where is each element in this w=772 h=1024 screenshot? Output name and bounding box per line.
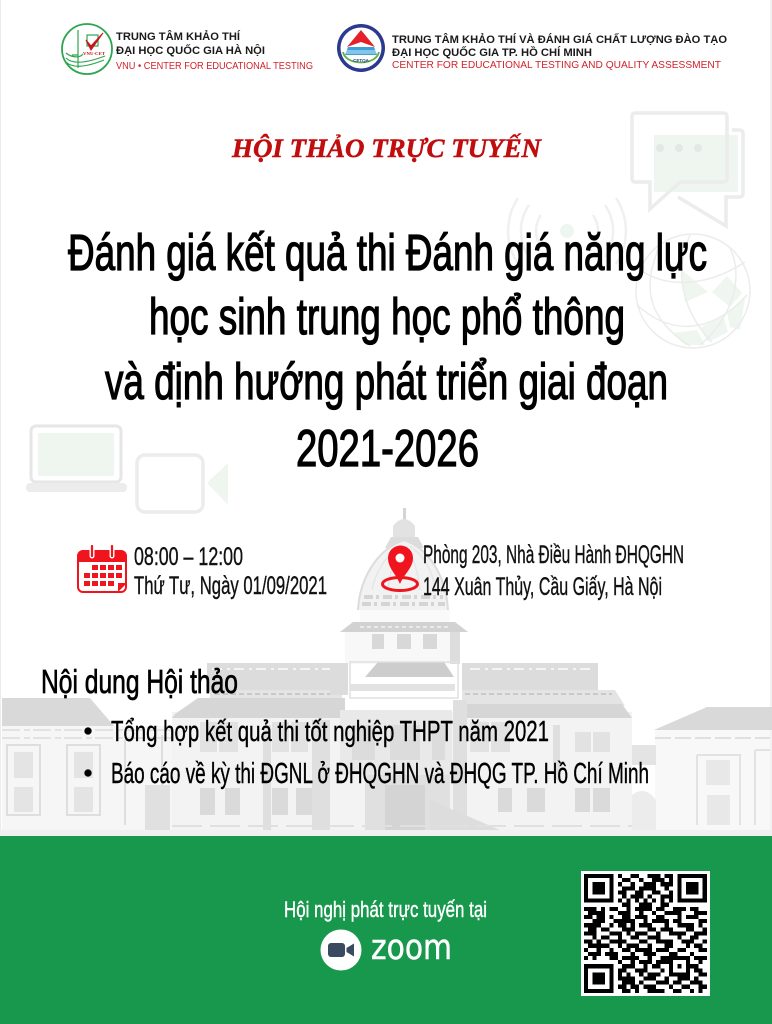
header logo: VNU-CET: VNU-CET: [83, 51, 105, 56]
background icon: globe: [636, 234, 750, 348]
background icon: chat bubbles: [632, 113, 743, 226]
bullet list: [84, 716, 649, 790]
header logo: CETQA: CETQA: [353, 58, 370, 63]
footer panel: [0, 836, 772, 1024]
main title: 2021-2026: [296, 420, 479, 478]
header logo: CETQA: [337, 24, 385, 72]
event location: [423, 541, 684, 601]
QR code: [581, 871, 710, 996]
building: central dome and tower: [330, 508, 468, 698]
header text: CETQA center: [392, 33, 727, 71]
zoom wordmark: zoom: [371, 928, 452, 968]
header text: VNU center: ĐẠI HỌC QUỐC GIA HÀ NỘI: [116, 43, 265, 57]
heading: workshop content: Nội dung Hội thảo: [41, 663, 238, 700]
icon: location pin: [382, 546, 418, 590]
bullet list: Tổng hợp kết quả thi tốt nghiệp THPT năm 2021: [111, 716, 549, 748]
background icon: signal waves: [508, 198, 626, 264]
header text: CETQA center: TRUNG TÂM KHẢO THÍ VÀ ĐÁNH GIÁ CHẤT LƯỢNG ĐÀO TẠO: [392, 33, 727, 46]
header text: VNU center: VNU • CENTER FOR EDUCATIONAL TESTING: [116, 60, 313, 72]
footer text: streamed online: Hội nghị phát trực tuyến tại: [284, 897, 487, 922]
building: left wing: [2, 698, 174, 830]
event time: [134, 543, 327, 600]
building: main hall: [172, 663, 632, 830]
icon: zoom logo: [320, 930, 362, 970]
building: right wing: [632, 707, 772, 830]
header logo: VNU-CET: [62, 24, 112, 74]
background icon: video camera: [137, 455, 228, 512]
background icon: laptop: [26, 426, 127, 492]
background illustration: university building: [0, 508, 772, 836]
main title: [68, 224, 707, 478]
header text: VNU center: TRUNG TÂM KHẢO THÍ: [116, 30, 241, 43]
subtitle: online workshop: HỘI THẢO TRỰC TUYẾN: [231, 134, 542, 163]
event time: Thứ Tư, Ngày 01/09/2021: [134, 572, 327, 600]
header text: CETQA center: ĐẠI HỌC QUỐC GIA TP. HỒ CHÍ MINH: [392, 45, 592, 59]
header text: CETQA center: CENTER FOR EDUCATIONAL TESTING AND QUALITY ASSESSMENT: [392, 59, 722, 71]
icon: calendar: [78, 546, 127, 592]
event time: 08:00 – 12:00: [134, 543, 243, 571]
header text: VNU center: [116, 30, 313, 72]
